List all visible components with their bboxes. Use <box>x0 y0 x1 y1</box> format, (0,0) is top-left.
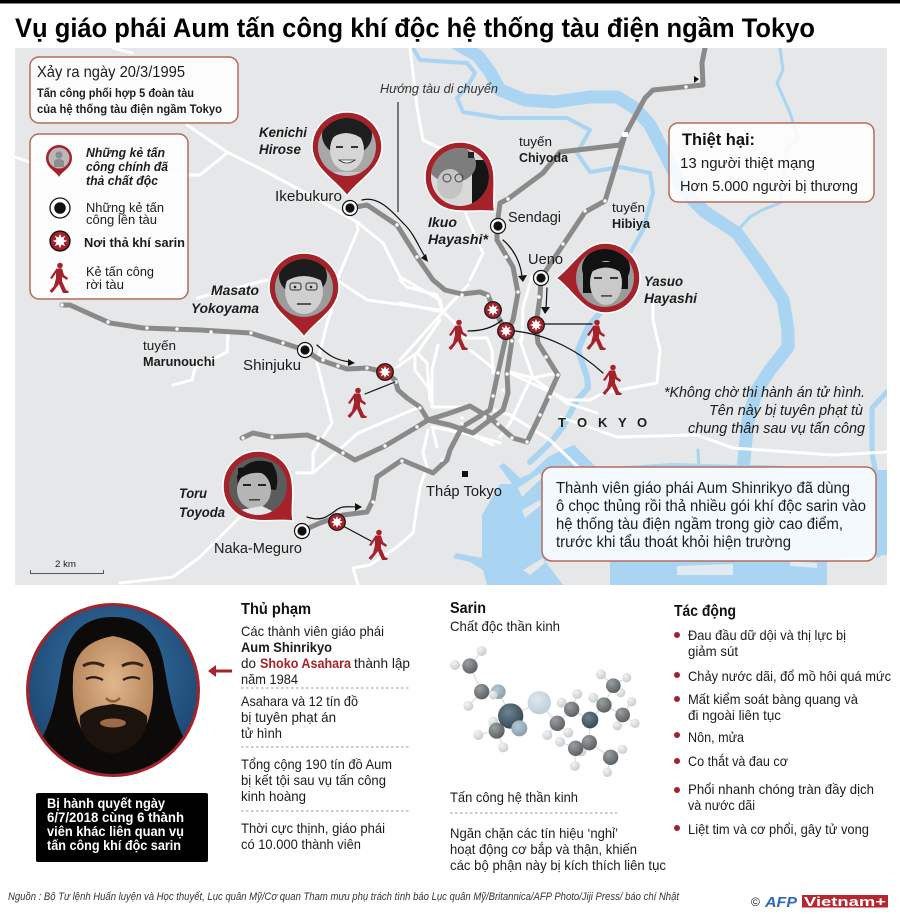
label: Chiyoda line: Chiyoda <box>519 151 569 165</box>
pin: Ikuo Hayashi <box>424 141 496 212</box>
column: sarin <box>450 600 666 873</box>
legend: công chính đã <box>86 159 169 174</box>
label: Naka-Meguro: Naka-Meguro <box>214 541 302 557</box>
logos: AFP and Vietnam+ <box>751 894 888 911</box>
text: mechanism: các bộ phận này bị kích thích liên tục <box>450 857 666 873</box>
station dots <box>60 85 688 504</box>
fact: the sect: Các thành viên giáo phái <box>241 623 384 639</box>
fact: the sect: Shoko Asahara <box>260 655 351 671</box>
footnote on Ikuo Hayashi: chung thân sau vụ tấn công <box>688 420 866 437</box>
label: Ueno: Ueno <box>528 252 563 268</box>
legend icon: walker <box>50 263 69 293</box>
legend: Kẻ tấn công <box>86 264 154 279</box>
bullet list of effects <box>674 627 891 837</box>
label: Masato Yokoyama: Yokoyama <box>191 300 259 316</box>
caption: execution: viên khác liên quan vụ <box>47 823 184 839</box>
logos: AFP and Vietnam+: Vietnam+ <box>804 895 886 909</box>
title: Vụ giáo phái Aum tấn công khí độc hệ thống tàu điện ngầm Tokyo <box>15 13 815 43</box>
station: Shinjuku <box>298 342 312 358</box>
legend icon: main attacker pin <box>46 145 72 177</box>
text: mechanism: hoạt động cơ bắp và thận, khiến <box>450 841 637 857</box>
label: Marunouchi line: Marunouchi <box>143 355 215 369</box>
bullet list of effects: Phổi nhanh chóng tràn đầy dịch <box>688 781 874 797</box>
scale bar: 2 km <box>55 559 76 570</box>
station: Naka-Meguro <box>294 524 310 538</box>
label: Chiyoda line: tuyến <box>519 135 552 149</box>
legend: thả chất độc <box>86 173 159 188</box>
map of Tokyo subway attacks <box>15 44 887 585</box>
station: Sendagi <box>490 218 506 234</box>
caption: execution <box>36 793 208 862</box>
fact: convictions <box>241 756 392 804</box>
label: Yasuo Hayashi: Yasuo <box>644 273 683 289</box>
bullet list of effects: Mất kiểm soát bàng quang và <box>688 691 858 707</box>
column: perpetrators <box>241 601 410 852</box>
fact: the sect: thành lập <box>354 655 410 671</box>
box: date of attack: của hệ thống tàu điện ngầm Tokyo <box>37 102 222 116</box>
label: Marunouchi line: tuyến <box>143 339 176 353</box>
legend: Những kẻ tấn <box>86 145 165 160</box>
box: attack method: trước khi tẩu thoát khỏi hiện trường <box>556 534 791 551</box>
box: attack method: ô chọc thủng rồi thả nhiều gói khí độc sarin vào <box>556 498 866 515</box>
landmark: Tokyo Tower <box>426 471 502 500</box>
direction note line <box>397 102 399 212</box>
text: attacks nervous system: Tấn công hệ thần kinh <box>450 789 578 805</box>
label: Ikuo Hayashi: Hayashi* <box>428 231 489 247</box>
legend: Những kẻ tấn <box>86 200 164 215</box>
fact: death sentences <box>241 693 358 741</box>
box: damage: Hơn 5.000 người bị thương <box>680 178 858 195</box>
map background <box>15 48 887 585</box>
pin: Toru Toyoda <box>222 450 294 522</box>
box: date of attack <box>30 57 238 123</box>
bullet list of effects: Nôn, mửa <box>688 729 744 745</box>
legend <box>30 134 188 299</box>
fact: the sect: do <box>241 655 256 671</box>
landmark: Tokyo Tower: Tháp Tokyo <box>426 484 502 500</box>
subway lines <box>62 48 705 531</box>
logos: AFP and Vietnam+: AFP <box>764 894 798 911</box>
bullet list of effects: giảm sút <box>688 643 738 659</box>
text: mechanism: Ngăn chặn các tín hiệu ‘nghỉ’ <box>450 825 618 841</box>
footnote on Ikuo Hayashi: Tên này bị tuyên phạt tù <box>709 402 864 419</box>
fact: death sentences: tử hình <box>241 725 282 741</box>
fact: convictions: kinh hoàng <box>241 788 306 804</box>
box: damage <box>669 123 874 202</box>
box: attack method: Thành viên giáo phái Aum Shinrikyo đã dùng <box>556 480 850 497</box>
bullet list of effects: Liệt tim và cơ phổi, gây tử vong <box>688 821 869 837</box>
station: Ueno <box>534 270 548 286</box>
water: rivers and Tokyo Bay <box>15 44 887 585</box>
pin: Kenichi Hirose <box>312 112 382 196</box>
label: Ikebukuro: Ikebukuro <box>275 189 342 205</box>
label: Masato Yokoyama <box>191 282 259 316</box>
fact: membership: Thời cực thịnh, giáo phái <box>241 820 385 836</box>
box: date of attack: Xảy ra ngày 20/3/1995 <box>37 64 185 81</box>
heading: Thủ phạm: Thủ phạm <box>241 601 311 618</box>
box: damage: 13 người thiệt mạng <box>680 155 815 172</box>
text: mechanism <box>450 825 666 873</box>
legend: Nơi thả khí sarin <box>84 235 185 250</box>
fact: death sentences: bị tuyên phạt án <box>241 709 336 725</box>
label: TOKYO: TOKYO <box>558 415 647 430</box>
fact: convictions: bị kết tội sau vụ tấn công <box>241 772 386 788</box>
fact: membership: có 10.000 thành viên <box>241 836 361 852</box>
direction note: Hướng tàu di chuyển <box>380 81 498 96</box>
label: Toru Toyoda <box>179 485 225 520</box>
label: Shinjuku: Shinjuku <box>243 358 301 374</box>
legend: rời tàu <box>86 277 124 292</box>
label: Sendagi: Sendagi <box>508 210 561 226</box>
fact: the sect: năm 1984 <box>241 671 298 687</box>
caption: execution: 6/7/2018 cùng 6 thành <box>47 809 184 825</box>
legend icon: boarding station <box>50 198 70 218</box>
label: Kenichi Hirose: Hirose <box>259 141 301 157</box>
label: Ikuo Hayashi <box>428 214 489 247</box>
label: Hibiya line: tuyến <box>612 201 645 215</box>
box: date of attack: Tấn công phối hợp 5 đoàn tàu <box>37 86 194 100</box>
top black bar <box>0 0 900 4</box>
caption: execution: tấn công khí độc sarin <box>47 837 181 853</box>
label: Toru Toyoda: Toyoda <box>179 504 225 520</box>
label: Yasuo Hayashi: Hayashi <box>644 290 698 306</box>
scale bar <box>30 559 104 574</box>
footnote on Ikuo Hayashi <box>664 384 866 437</box>
caption: execution: Bị hành quyết ngày <box>47 795 165 811</box>
label: Kenichi Hirose <box>259 124 308 157</box>
label: Chiyoda line <box>519 135 569 165</box>
attacker walking icons <box>348 320 622 560</box>
column: effects <box>674 603 891 837</box>
direction arrows along lines <box>307 76 699 519</box>
fact: the sect <box>241 623 410 687</box>
box: attack method: hệ thống tàu điện ngầm trong giờ cao điểm, <box>556 516 843 533</box>
logos: AFP and Vietnam+: © <box>751 895 760 909</box>
heading: Tác động: Tác động <box>674 603 736 620</box>
subheading: nerve agent: Chất độc thần kinh <box>450 618 560 634</box>
box: attack method <box>542 467 876 561</box>
label: Marunouchi line <box>143 339 215 369</box>
white road network <box>15 48 887 585</box>
label: Ikuo Hayashi: Ikuo <box>428 214 457 230</box>
station: Ikebukuro <box>342 200 358 216</box>
leader lines to walkers <box>343 320 603 541</box>
arrow pointing to portrait <box>208 665 232 677</box>
label: Hibiya line <box>612 201 651 231</box>
heading: Sarin: Sarin <box>450 600 486 617</box>
label: Masato Yokoyama: Masato <box>211 282 259 298</box>
bullet list of effects: và nước dãi <box>688 797 755 813</box>
pin: Masato Yokoyama <box>269 253 339 337</box>
box: damage: Thiệt hại: <box>682 130 755 149</box>
fact: death sentences: Asahara và 12 tín đồ <box>241 693 358 709</box>
molecule diagram <box>450 646 640 777</box>
fact: convictions: Tổng cộng 190 tín đồ Aum <box>241 756 392 772</box>
sarin release markers <box>329 302 544 530</box>
pin: Yasuo Hayashi <box>556 243 640 313</box>
land strips in the bay <box>518 473 542 497</box>
portrait: Shoko Asahara <box>26 603 200 777</box>
label: Yasuo Hayashi <box>644 273 698 306</box>
fact: membership <box>241 820 385 852</box>
bullet list of effects: Đau đầu dữ dội và thị lực bị <box>688 627 846 643</box>
label: Toru Toyoda: Toru <box>179 485 207 501</box>
footnote on Ikuo Hayashi: *Không chờ thi hành án tử hình. <box>664 384 865 401</box>
bullet list of effects: Co thắt và đau cơ <box>688 753 788 769</box>
fact: the sect: Aum Shinrikyo <box>241 639 332 655</box>
label: Kenichi Hirose: Kenichi <box>259 124 308 140</box>
legend icon: sarin release <box>50 231 70 251</box>
bullet list of effects: đi ngoài liên tục <box>688 707 781 723</box>
legend: công lên tàu <box>86 212 157 227</box>
label: Hibiya line: Hibiya <box>612 217 651 231</box>
source line: Nguồn : Bộ Tư lệnh Huấn luyện và Học thuyết, Lục quân Mỹ/Cơ quan Tham mưu phụ trách tình báo Lục quân Mỹ/Britannica/AFP Photo/Jiji Press/ báo chí Nhật <box>8 891 680 903</box>
